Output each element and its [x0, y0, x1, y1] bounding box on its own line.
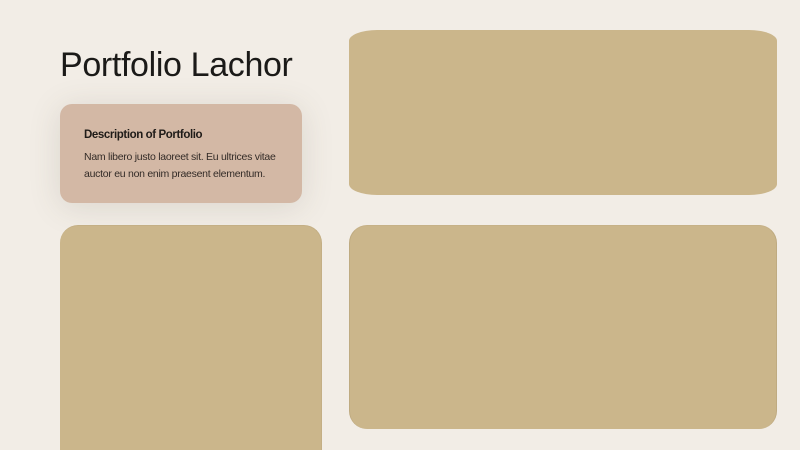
title: Portfolio Lachor — [60, 46, 293, 84]
image placeholder: top right — [349, 30, 777, 195]
card body text — [84, 151, 276, 180]
card heading: Description of Portfolio — [84, 129, 202, 141]
card body text: auctor eu non enim praesent elementum. — [84, 168, 265, 180]
image placeholder: bottom right — [349, 225, 777, 429]
panel: description card — [60, 104, 302, 203]
image placeholder: bottom left — [60, 225, 322, 450]
card body text: Nam libero justo laoreet sit. Eu ultrices vitae — [84, 151, 276, 163]
